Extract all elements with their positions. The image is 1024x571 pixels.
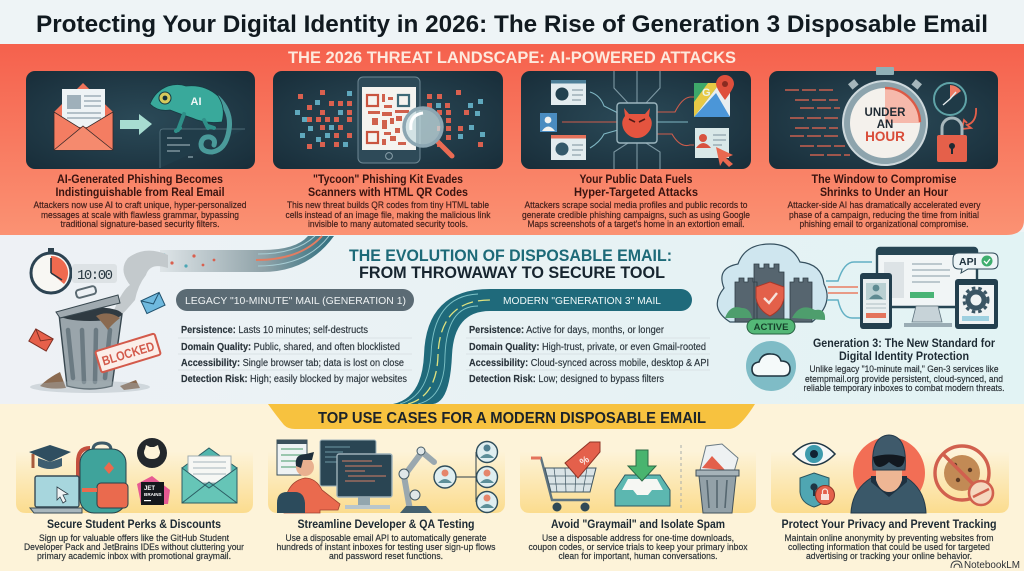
list: modern: Detection Risk: Low; designed to bypass filters — [469, 374, 664, 385]
icon: code monitors — [320, 440, 392, 509]
card: privacy illustration — [771, 435, 1009, 513]
icon: cloud castle — [717, 244, 827, 334]
icon: curved arrow — [962, 108, 976, 129]
icon: JetBrains logo — [137, 476, 170, 505]
card title: Tycoon: Scanners with HTML QR Codes — [308, 185, 468, 199]
card text: Tycoon — [286, 200, 491, 229]
card: graymail illustration — [520, 442, 756, 513]
list: modern: Domain Quality: High-trust, private, or even Gmail-rooted — [469, 342, 706, 353]
icon: discount tag — [565, 442, 600, 478]
list: legacy: Domain Quality: Public, shared, and often blocklisted — [181, 342, 400, 353]
icon: JetBrains logo: JET — [144, 486, 155, 492]
icon: GitHub mark — [137, 438, 167, 468]
callout: API — [953, 253, 998, 273]
card title: AI phishing: Indistinguishable from Real Email — [56, 185, 224, 199]
card: AI phishing illustration — [26, 71, 255, 169]
icon: monitor — [877, 248, 977, 327]
icon: cloud castle: ACTIVE — [754, 322, 788, 333]
card text: public data: Maps screenshots of a target's home in an extortion email. — [528, 219, 744, 229]
text: generation 3: reliable temporary inboxes to combat modern threats. — [804, 383, 1004, 393]
panel: use cases — [0, 404, 1024, 571]
card title: Tycoon: "Tycoon" Phishing Kit Evades — [313, 172, 463, 186]
text: generation 3: Unlike legacy "10-minute mail," Gen-3 services like — [810, 364, 998, 374]
card text: public data: Attackers scrape social media profiles and public records to — [524, 200, 748, 210]
icon: developer — [277, 452, 340, 513]
text: generation 3 — [804, 364, 1004, 393]
heading: evolution: THE EVOLUTION OF DISPOSABLE EMAIL: — [349, 247, 672, 265]
dashed divider — [680, 445, 682, 510]
icon: shield with lock — [800, 473, 834, 507]
card text: under an hour: phase of a campaign, reducing the time from initial — [789, 210, 979, 220]
card text: developer: Use a disposable email API to automatically generate — [286, 533, 486, 543]
callout: API: API — [959, 256, 977, 268]
card text: Tycoon: This new threat builds QR codes from tiny HTML table — [287, 200, 489, 210]
icon: graduation cap — [29, 445, 71, 469]
card text: graymail: coupon codes, or service trials to keep your primary inbox — [528, 542, 748, 552]
heading: generation 3: Generation 3: The New Standard for — [813, 336, 995, 350]
card title: graymail: Avoid "Graymail" and Isolate Spam — [551, 517, 725, 531]
icon: cloud badge — [746, 341, 796, 391]
card text: public data — [522, 200, 750, 229]
card title: under an hour — [812, 172, 957, 199]
card: developer illustration — [268, 440, 505, 513]
icon: shopping cart — [531, 458, 596, 512]
panel: threat landscape — [0, 44, 1024, 235]
icon: phone — [860, 273, 892, 329]
pill: legacy: LEGACY "10-MINUTE" MAIL (GENERATION 1) — [185, 295, 406, 307]
card title: under an hour: The Window to Compromise — [812, 172, 957, 186]
banner: use cases heading: TOP USE CASES FOR A MODERN DISPOSABLE EMAIL — [318, 410, 706, 427]
icon: checklist window — [277, 440, 307, 475]
card title: AI phishing — [56, 172, 224, 199]
icon: blue envelope — [141, 292, 165, 314]
icon: AI chip with devil — [617, 103, 657, 143]
icon: discount tag: % — [578, 454, 592, 468]
icon: AI chameleon — [150, 84, 245, 168]
speed lines — [785, 90, 850, 155]
icon: envelope with letter — [54, 83, 113, 150]
icon: arrow — [120, 114, 152, 135]
card title: privacy: Protect Your Privacy and Prevent Tracking — [782, 517, 996, 531]
icon: teal envelope — [182, 448, 237, 503]
heading: threat landscape: THE 2026 THREAT LANDSCAPE: AI-POWERED ATTACKS — [288, 48, 736, 67]
card text: developer — [276, 533, 496, 561]
list: modern: Persistence: Active for days, months, or longer — [469, 325, 665, 336]
card title: public data: Hyper-Targeted Attacks — [574, 185, 698, 199]
smoke — [112, 251, 168, 318]
icon: stopwatch — [843, 67, 927, 165]
icon: target profile with cursor — [695, 128, 733, 167]
icon: AI chameleon: AI — [190, 96, 202, 108]
icon: eye — [793, 443, 835, 465]
card text: graymail — [528, 533, 748, 561]
icon: laptop — [30, 476, 82, 513]
heading: generation 3 — [813, 336, 995, 363]
circuit lines — [562, 71, 694, 169]
list: modern — [466, 325, 710, 385]
icon: stopwatch: HOUR — [865, 129, 905, 144]
pill: legacy — [176, 289, 414, 311]
list: legacy — [178, 325, 412, 385]
list: legacy: Accessibility: Single browser tab; data is lost on close — [181, 358, 404, 369]
panel: evolution section — [29, 236, 1005, 404]
card title: AI phishing: AI-Generated Phishing Becomes — [57, 172, 223, 186]
heading: generation 3: Digital Identity Protection — [839, 349, 969, 363]
icon: padlock — [937, 118, 967, 162]
card text: privacy: Maintain online anonymity by preventing websites from — [784, 533, 994, 543]
card text: privacy: advertising or tracking your online behavior. — [806, 551, 972, 561]
icon: JetBrains logo: BRAINS — [144, 492, 162, 497]
icon: stopwatch 10:00 — [31, 248, 117, 293]
card title: Tycoon — [308, 172, 468, 199]
icon: stopwatch: UNDER — [865, 107, 906, 119]
card text: AI phishing — [34, 200, 246, 229]
icon: red envelope — [29, 329, 53, 351]
icon: backpack — [78, 443, 128, 513]
icon: small clock — [934, 83, 966, 115]
card: Tycoon illustration — [273, 71, 503, 169]
card text: Tycoon: invisible to many automated security tools. — [308, 219, 468, 229]
heading: evolution: FROM THROWAWAY TO SECURE TOOL — [359, 264, 665, 282]
icon: map pin tile — [694, 75, 734, 117]
card text: under an hour: Attacker-side AI has dramatically accelerated every — [788, 200, 981, 210]
card title: public data — [574, 172, 698, 199]
card text: under an hour — [788, 200, 981, 229]
card text: developer: hundreds of instant inboxes for testing user sign-up flows — [276, 542, 496, 552]
card text: privacy — [784, 533, 994, 561]
card text: privacy: collecting information that could be used for targeted — [788, 542, 990, 552]
icon: blocked cookie — [935, 446, 993, 505]
card title: public data: Your Public Data Fuels — [580, 172, 693, 186]
icon: tablet with gear — [955, 279, 998, 329]
icon: user fan-out — [434, 442, 498, 512]
arrows: cloud to devices — [826, 262, 872, 318]
title: Protecting Your Digital Identity in 2026: The Rise of Generation 3 Disposable Email — [36, 11, 988, 38]
icon: magnifying glass — [404, 108, 452, 156]
card text: AI phishing: messages at scale with flawless grammar, bypassing — [41, 210, 239, 220]
text: generation 3: etempmail.org provide persistent, cloud-synced, and — [805, 374, 1003, 384]
icon: map pin tile: G — [702, 87, 711, 99]
card title: developer: Streamline Developer & QA Testing — [298, 517, 474, 531]
card text: student: Sign up for valuable offers like the GitHub Student — [39, 533, 229, 543]
icon: trash with paper — [696, 444, 739, 513]
card text: AI phishing: traditional signature-based security filters. — [60, 219, 220, 229]
card text: public data: generate credible phishing campaigns, such as using Google — [522, 210, 750, 220]
card text: developer: and password reset functions. — [329, 551, 443, 561]
watermark: NotebookLM: NotebookLM — [964, 560, 1020, 571]
card: under an hour illustration — [769, 67, 998, 169]
icon: robot arm — [399, 447, 434, 513]
card: student illustration — [16, 438, 253, 513]
card text: student: Developer Pack and JetBrains IDEs without cluttering your — [24, 542, 244, 552]
ribbon: modern road — [393, 289, 692, 404]
list: modern: Accessibility: Cloud-synced across mobile, desktop & API — [469, 358, 709, 369]
card text: student — [24, 533, 244, 561]
card text: under an hour: phishing email to organizational compromise. — [800, 219, 968, 229]
icon: inbox tray — [615, 450, 670, 506]
icon: stopwatch: AN — [877, 119, 893, 131]
icon: trash can — [30, 286, 150, 393]
card text: Tycoon: cells instead of an image file, making the malicious link — [286, 210, 491, 220]
icon: phone with QR code — [358, 77, 420, 163]
panel: evolution background — [0, 232, 1024, 406]
list: legacy: Persistence: Lasts 10 minutes; self-destructs — [181, 325, 368, 336]
icon: stopwatch 10:00: 10:00 — [77, 268, 113, 284]
stamp: blocked: BLOCKED — [100, 338, 156, 369]
icon: hooded figure — [851, 435, 926, 513]
list: legacy: Detection Risk: High; easily blocked by major websites — [181, 374, 407, 385]
card title: student: Secure Student Perks & Discounts — [47, 517, 221, 531]
card text: graymail: Use a disposable address for one-time downloads, — [542, 533, 734, 543]
card title: under an hour: Shrinks to Under an Hour — [820, 185, 948, 199]
card: public data illustration — [521, 71, 751, 169]
icon: profile cards left — [540, 80, 586, 160]
card text: student: primary academic inbox with promotional graymail. — [37, 551, 231, 561]
card text: graymail: clean for important, human conversations. — [558, 551, 718, 561]
ribbon: from smoke to title — [160, 236, 334, 272]
pixel cells right — [427, 90, 483, 147]
heading: evolution — [349, 247, 672, 282]
banner: use cases heading — [268, 404, 755, 429]
card text: AI phishing: Attackers now use AI to craft unique, hyper-personalized — [34, 200, 246, 210]
ribbon: modern road: MODERN "GENERATION 3" MAIL — [503, 295, 661, 307]
pixel cells left — [298, 90, 352, 149]
